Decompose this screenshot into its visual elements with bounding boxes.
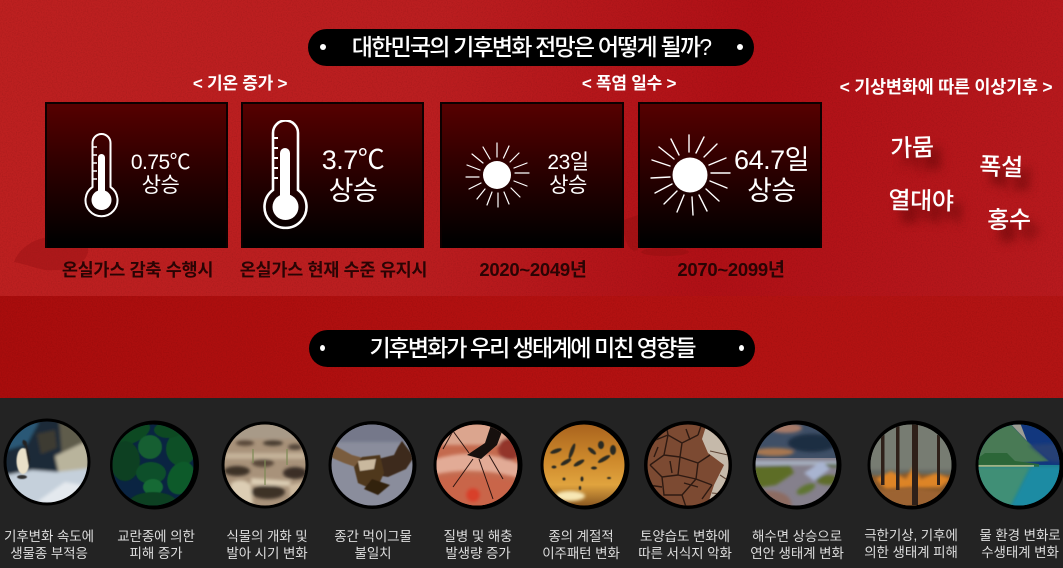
value: 64.7일 상승 (734, 145, 809, 206)
heading: 기온 증가: < 기온 증가 > (193, 74, 287, 93)
label: 물 환경: 물 환경 변화로 (979, 528, 1061, 543)
label: 교란종 피해: 교란종에 의한 (117, 529, 195, 544)
label: 질병 해충 (444, 529, 512, 561)
value: 3.7도 상승 (322, 145, 384, 206)
icon: large sun (650, 134, 731, 216)
photo: mosquito on red skin (432, 420, 522, 510)
label: 개화 발아 시기: 식물의 개화 및 (226, 529, 308, 544)
icon: large thermometer (263, 120, 308, 230)
label: 물 환경: 수생태계 변화 (981, 545, 1059, 560)
label: 생물종 부적응: 생물종 부적응 (10, 546, 88, 561)
title pill: 생태계 영향 (309, 330, 755, 367)
icon: small thermometer (84, 133, 118, 218)
label: 해수면 상승: 연안 생태계 변화 (750, 546, 844, 561)
photo: migrating birds at sunset (539, 420, 630, 510)
value: 23일 상승: 23일 (547, 151, 589, 174)
label: 먹이그물 불일치: 불일치 (355, 546, 391, 561)
label: 계절적 이주패턴: 이주패턴 변화 (542, 546, 620, 561)
value: 23일 상승 (547, 151, 589, 197)
heading: 폭염 일수: < 폭염 일수 > (582, 74, 676, 93)
label: 먹이그물 불일치 (334, 529, 412, 561)
label: 해수면 상승: 해수면 상승으로 (752, 529, 842, 544)
label: 극한기상 (864, 528, 958, 560)
label: 극한기상: 의한 생태계 피해 (864, 545, 958, 560)
label: 토양습도: 토양습도 변화에 (640, 529, 730, 544)
title pill: 대한민국의 기후변화 전망: 대한민국의 기후변화 전망은 어떻게 될까? (352, 34, 710, 60)
value: 64.7일 상승: 64.7일 (734, 145, 809, 175)
background: darker red band (0, 296, 1063, 398)
title pill: 대한민국의 기후변화 전망 (308, 29, 754, 66)
icon: small sun (465, 142, 530, 208)
word: 홍수: 홍수 (987, 207, 1031, 234)
photo: green leaves (110, 420, 199, 510)
value: 0.75도 상승 (131, 151, 190, 197)
label: 생물종 부적응: 기후변화 속도에 (4, 529, 94, 544)
photo: eagle (327, 420, 417, 510)
word: 폭설: 폭설 (979, 153, 1023, 182)
label: 개화 발아 시기 (226, 529, 308, 561)
caption: 2020~2049년: 2020~2049년 (479, 259, 587, 280)
background: grain and blotches (0, 0, 1063, 398)
value: 0.75도 상승: 0.75℃ (131, 151, 190, 174)
label: 생물종 부적응 (4, 529, 94, 561)
panel: 23일 상승 (440, 102, 624, 248)
photo: forest fire (866, 420, 956, 510)
label: 개화 발아 시기: 발아 시기 변화 (226, 546, 308, 561)
caption: 현재 수준 유지시: 온실가스 현재 수준 유지시 (240, 260, 427, 280)
value: 3.7도 상승: 3.7℃ (322, 145, 384, 175)
caption: 2070~2099년: 2070~2099년 (677, 259, 785, 280)
heading: 이상기후: < 기상변화에 따른 이상기후 > (840, 77, 1052, 97)
label: 교란종 피해: 피해 증가 (130, 546, 182, 561)
label: 계절적 이주패턴 (542, 529, 620, 561)
panel: 3.7도 상승 (241, 102, 424, 248)
value: 0.75도 상승: 상승 (142, 174, 179, 197)
label: 교란종 피해 (117, 529, 195, 561)
photo: seedlings in trays (220, 420, 310, 510)
value: 3.7도 상승: 상승 (329, 176, 377, 206)
panel: 64.7일 상승 (638, 102, 822, 248)
value: 64.7일 상승: 상승 (747, 176, 796, 206)
value: 23일 상승: 상승 (549, 174, 587, 197)
dark panel: ecosystem impacts (0, 398, 1063, 568)
photo: coastal wetland (752, 420, 842, 510)
photo: cracked soil (643, 420, 733, 510)
label: 질병 해충: 질병 및 해충 (444, 529, 512, 544)
photo: penguin on ice (2, 417, 92, 507)
label: 극한기상: 극한기상, 기후에 (864, 528, 958, 543)
photo: mountain lake (974, 420, 1063, 510)
label: 질병 해충: 발생량 증가 (445, 546, 511, 561)
word: 열대야: 열대야 (888, 187, 954, 216)
label: 해수면 상승 (750, 529, 844, 561)
photo circles (4, 418, 1063, 510)
word: 가뭄: 가뭄 (890, 134, 934, 163)
label: 토양습도: 따른 서식지 악화 (638, 546, 732, 561)
label: 먹이그물 불일치: 종간 먹이그물 (334, 529, 412, 544)
title pill: 생태계 영향: 기후변화가 우리 생태계에 미친 영향들 (369, 335, 695, 361)
panel: 0.75도 상승 (45, 102, 228, 248)
label: 물 환경 (979, 528, 1061, 560)
label: 계절적 이주패턴: 종의 계절적 (548, 529, 614, 544)
label: 토양습도 (638, 529, 732, 561)
background: red textured upper area (0, 0, 1063, 296)
caption: 감축 수행시: 온실가스 감축 수행시 (62, 260, 213, 280)
